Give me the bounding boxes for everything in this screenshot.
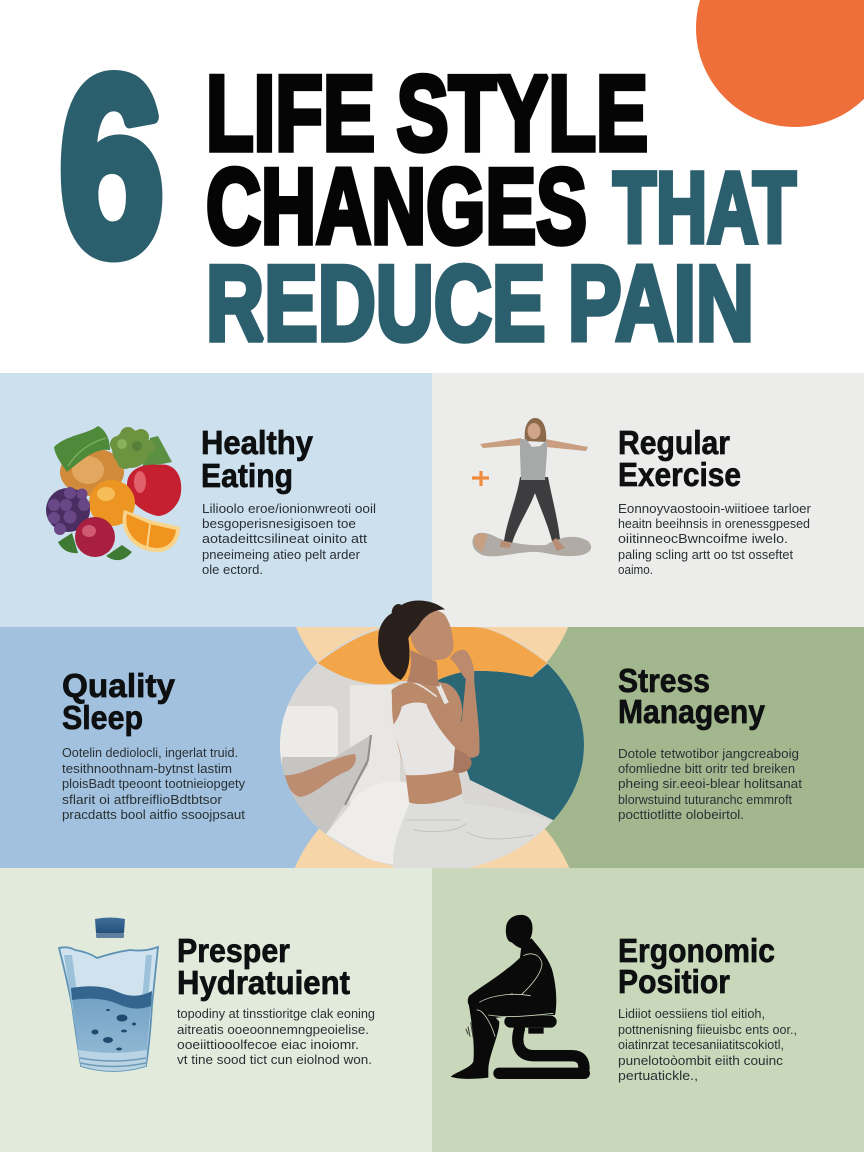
- hair and head: [525, 418, 546, 442]
- text block: proper hydration: aitreatis ooeoonnemngpeoielise.: [177, 1023, 369, 1037]
- bottle cap: [95, 918, 125, 934]
- legs: [504, 477, 560, 543]
- text block: regular exercise: [618, 502, 811, 577]
- title line: LIFE STYLE: LIFE STYLE: [206, 53, 648, 173]
- panel: regular exercise: [472, 418, 811, 577]
- header background: [0, 0, 864, 373]
- tank top: [520, 439, 547, 480]
- center illustration: woman in oval: [280, 600, 584, 868]
- heading: Presper Hydratuient: Presper: [177, 932, 290, 969]
- folded arm: [427, 676, 480, 758]
- icon: fruit and vegetables: [46, 426, 181, 560]
- tremor marks: [466, 1022, 473, 1038]
- arms: [480, 438, 588, 451]
- water: [71, 988, 152, 1053]
- face: [410, 610, 454, 660]
- orange corner circle: [696, 0, 864, 127]
- panel: proper hydration: [59, 918, 375, 1071]
- heading: Ergonomic Positior: [618, 932, 775, 1000]
- text block: quality sleep: pracdatts bool aitfio ssoojpsaut: [62, 808, 246, 822]
- text block: regular exercise: heaitn beeihnsis in orenessgpesed: [618, 517, 810, 531]
- text block: ergonomic position: [618, 1007, 797, 1083]
- heading: Ergonomic Positior: Positior: [618, 963, 730, 1000]
- text block: quality sleep: Ootelin dediolocli, ingerlat truid.: [62, 746, 238, 760]
- text block: healthy eating: [202, 502, 376, 577]
- figure: [451, 915, 556, 1079]
- icon: orange plus: [472, 471, 489, 486]
- text block: stress management: Dotole tetwotibor jangcreaboig: [618, 747, 799, 761]
- torso: [391, 681, 462, 804]
- heading: Presper Hydratuient: Hydratuient: [177, 964, 350, 1001]
- text block: ergonomic position: pottnenisning fiieuisbc ents oor.,: [618, 1023, 797, 1037]
- white trousers: [393, 792, 551, 868]
- heading: Presper Hydratuient: [177, 932, 350, 1001]
- outline highlights: [477, 954, 553, 1037]
- panel backgrounds: [0, 373, 864, 1152]
- orange arch: [318, 627, 547, 684]
- hand at chin: [450, 650, 474, 680]
- heading: Healthy Eating: [201, 424, 314, 494]
- heading: Regular Exercise: [618, 424, 741, 493]
- text block: quality sleep: ploisBadt tpeoont tootnieiopgety: [62, 777, 246, 791]
- text block: proper hydration: [177, 1007, 375, 1067]
- text block: healthy eating: pneeimeing atieo pelt arder: [202, 548, 360, 562]
- icon: water glass and cap: [59, 918, 158, 1071]
- glass body: [59, 947, 158, 1071]
- text block: regular exercise: oiitinneocBwncoifme iwelo.: [618, 532, 788, 546]
- icon: seated silhouette on stool: [451, 915, 590, 1079]
- big numeral 6: 6: [59, 26, 164, 307]
- mat: [472, 533, 591, 556]
- heading: Quality Sleep: Quality: [62, 667, 176, 704]
- icon: person standing arms out on mat: [472, 418, 591, 556]
- bubbles: [92, 1009, 136, 1050]
- text block: stress management: pocttiotlitte olobeirtol.: [618, 808, 744, 822]
- title line: CHANGES: CHANGES: [206, 146, 587, 266]
- heading: Quality Sleep: [62, 667, 176, 736]
- title block: [59, 26, 796, 363]
- neck: [407, 650, 440, 687]
- panel: healthy eating: [46, 424, 376, 577]
- text block: ergonomic position: punelotoòombit eiith couinc: [618, 1054, 783, 1068]
- text block: ergonomic position: oiatinrzat tecesaniiatitscokiotl,: [618, 1038, 784, 1052]
- text block: regular exercise: Eonnoyvaostooin-wiitioee tarloer: [618, 502, 811, 516]
- woman figure: [378, 601, 551, 868]
- heading: Regular Exercise: Regular: [618, 424, 730, 461]
- text block: quality sleep: [62, 746, 246, 822]
- text block: proper hydration: ooeiittiooolfecoe eiac inoiomr.: [177, 1038, 359, 1052]
- heading: Quality Sleep: Sleep: [62, 699, 143, 736]
- photo oval background: [280, 627, 584, 866]
- panel: stress management: [618, 662, 803, 822]
- text block: healthy eating: Lilioolo eroe/ionionwreoti ooil: [202, 502, 376, 516]
- text block: healthy eating: aotadeittcsilineat oinito att: [202, 532, 368, 546]
- text block: stress management: blorwstuind tuturanchc emmroft: [618, 793, 792, 807]
- text block: quality sleep: sflarit oi atfbreiflioBdtbtsor: [62, 793, 222, 807]
- heading: Healthy Eating: Eating: [201, 457, 293, 494]
- text block: quality sleep: tesithnoothnam-bytnst lastim: [62, 762, 232, 776]
- teal backdrop: [438, 664, 600, 820]
- heading: Stress Manageny: [618, 662, 766, 730]
- text block: regular exercise: oaimo.: [618, 563, 653, 577]
- panel: ergonomic position: [451, 915, 797, 1083]
- text block: regular exercise: paling scling artt oo tst osseftet: [618, 548, 794, 562]
- heading: Stress Manageny: Manageny: [618, 693, 766, 730]
- hair: [378, 601, 445, 680]
- white crop top: [392, 702, 456, 775]
- text block: healthy eating: besgoperisnesigisoen toe: [202, 517, 356, 531]
- heading: Stress Manageny: Stress: [618, 662, 710, 699]
- text block: stress management: pheing sir.eeoi-blear holitsanat: [618, 777, 803, 791]
- text block: proper hydration: vt tine sood tict cun eiolnod won.: [177, 1053, 372, 1067]
- stool: [518, 1029, 584, 1068]
- heading: Regular Exercise: Exercise: [618, 456, 741, 493]
- text block: ergonomic position: Lidiiot oessiiens tiol eitioh,: [618, 1007, 765, 1021]
- heading: Ergonomic Positior: Ergonomic: [618, 932, 775, 969]
- glass base: [78, 1050, 147, 1071]
- text block: stress management: [618, 747, 803, 822]
- text block: healthy eating: ole ectord.: [202, 563, 263, 577]
- text block: ergonomic position: pertuatickle.,: [618, 1069, 698, 1083]
- heading: Healthy Eating: Healthy: [201, 424, 314, 461]
- peach lobes: [294, 627, 570, 868]
- text block: proper hydration: topodiny at tinsstioritge clak eoning: [177, 1007, 375, 1021]
- panel: quality sleep: [62, 667, 246, 822]
- text block: stress management: ofomliedne bitt oritr ted breiken: [618, 762, 795, 776]
